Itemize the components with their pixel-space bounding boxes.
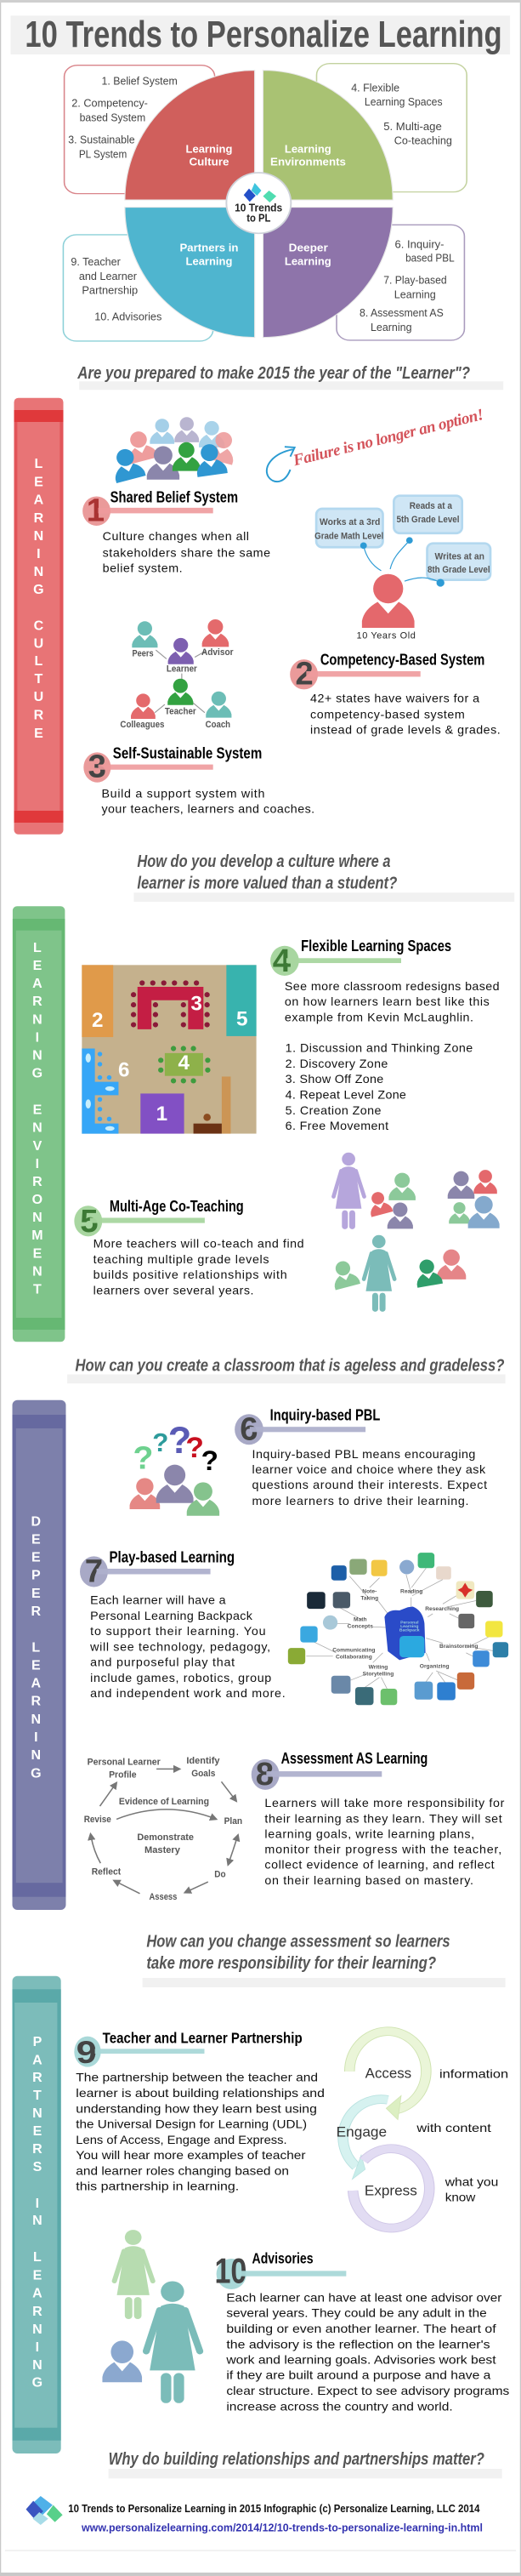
wheel quadrant: partners in learning: Learning — [186, 255, 232, 268]
callout box: deeper learning: 6. Inquiry- — [395, 238, 445, 251]
chart: support network: Peers — [133, 649, 154, 659]
icon: learners with question marks: ? — [168, 1421, 191, 1462]
sidebar: learning culture: I — [37, 547, 41, 561]
sidebar: partners in learning: N — [32, 2322, 42, 2337]
chart: personal learning backpack: Backpack — [399, 1628, 420, 1633]
trend 4: flexible learning spaces: 1. Discussion and Thinking Zone — [286, 1041, 473, 1055]
wheel quadrant: partners in learning: Partners in — [180, 242, 238, 254]
question band — [67, 1375, 506, 1383]
chart: competency levels around learner: Grade Math Level — [314, 531, 383, 541]
trend 7: play-based learning: to support their learning. You — [90, 1624, 266, 1638]
trend 9: teacher and learner partnership: You will hear more examples of teacher — [76, 2150, 306, 2163]
sidebar: deeper learning: I — [34, 1730, 38, 1745]
trend 3: self-sustainable system: 3 — [88, 749, 106, 784]
chart: access, engage, express cycle: Express — [365, 2183, 417, 2198]
trend 8: assessment as learning — [252, 1750, 505, 1887]
trend 10: advisories: Each learner can have at least one advisor over — [226, 2292, 501, 2305]
sidebar: partners in learning: N — [32, 2214, 42, 2228]
sidebar: deeper learning: N — [31, 1713, 41, 1727]
trend 9: teacher and learner partnership: Teacher and Learner Partnership — [103, 2031, 303, 2047]
panel: header and overview wheel — [11, 14, 510, 390]
callout box: deeper learning: based PBL — [405, 253, 455, 265]
sidebar: deeper learning: P — [31, 1569, 41, 1583]
sidebar: deeper learning — [12, 1400, 66, 1910]
sidebar: learning culture: G — [33, 583, 44, 597]
trend 7: play-based learning: and independent work and more. — [90, 1686, 286, 1700]
trend 3: self-sustainable system: Build a support system with — [101, 787, 264, 801]
trend 2: competency-based system: instead of grade levels & grades. — [310, 723, 501, 737]
question band — [143, 1978, 506, 1987]
chart: personal learning backpack: Learning — [400, 1624, 418, 1629]
sidebar: learning environment: V — [33, 1139, 42, 1154]
icon: footer puzzle logo — [26, 2496, 63, 2525]
sidebar: partners in learning: T — [33, 2089, 42, 2103]
trend 10: advisories: 10 — [214, 2251, 246, 2291]
chart: assessment cycle: Profile — [109, 1770, 137, 1780]
wheel quadrant: deeper learning: Learning — [285, 255, 331, 268]
trend 10: advisories: several years. They could be any adult in the — [226, 2308, 487, 2320]
chart: personal learning backpack: Reading — [400, 1588, 422, 1594]
sidebar: learning culture: R — [34, 511, 44, 526]
trend 9: teacher and learner partnership: learner is about building relationships and — [76, 2088, 325, 2100]
callout box: partners in learning: 10. Advisories — [94, 311, 161, 323]
trend 8: assessment as learning: Learners will take more responsibility for — [264, 1796, 505, 1809]
trend 1: shared belief system: belief system. — [103, 561, 183, 574]
chart: classroom floor plan: 2 — [92, 1009, 104, 1032]
chart: access, engage, express cycle: Engage — [337, 2124, 387, 2140]
callout box: partners in learning — [63, 235, 213, 341]
trend 7: play-based learning: 7 — [85, 1554, 103, 1590]
question: culture: How do you develop a culture where a — [137, 852, 390, 871]
sidebar: learning environment — [13, 906, 65, 1342]
chart: personal learning backpack: Communicating — [332, 1647, 375, 1653]
sidebar: learning culture: E — [34, 476, 43, 490]
wheel quadrant: deeper learning — [263, 208, 393, 338]
trend 3: self-sustainable system: your teachers, learners and coaches. — [101, 802, 314, 816]
sidebar: learning environment: N — [32, 1211, 42, 1225]
trend 6: inquiry-based PBL: Inquiry-based PBL means encouraging — [252, 1447, 475, 1461]
chart: competency levels around learner: 10 Years Old — [357, 631, 416, 641]
sidebar: deeper learning: E — [31, 1533, 41, 1547]
sidebar: partners in learning: A — [32, 2287, 42, 2301]
chart: classroom floor plan: 4 — [178, 1051, 190, 1074]
chart: assessment cycle — [84, 1756, 242, 1902]
trend 4: flexible learning spaces: 5. Creation Zone — [286, 1103, 382, 1117]
chart: personal learning backpack: Note- — [362, 1589, 377, 1595]
sidebar: deeper learning: E — [31, 1551, 41, 1565]
sidebar: learning culture: T — [35, 672, 43, 687]
trend 7: play-based learning: Each learner will have a — [90, 1593, 226, 1607]
trend 9: teacher and learner partnership: and learner roles changing based on — [76, 2165, 289, 2178]
trend 2: competency-based system: Competency-Based System — [320, 651, 484, 668]
trend 5: multi-age co-teaching: learners over several years. — [93, 1284, 253, 1297]
callout box: learning environments — [317, 64, 467, 192]
sidebar: learning environment: L — [33, 941, 42, 955]
trend 5: multi-age co-teaching — [74, 1198, 304, 1297]
trend 3: self-sustainable system — [83, 744, 314, 816]
sidebar: learning environment: R — [32, 1175, 42, 1189]
chart: assessment cycle: Identify — [186, 1756, 220, 1766]
question: culture: learner is more valued than a student? — [137, 874, 397, 892]
chart: assessment cycle: Demonstrate — [137, 1832, 194, 1843]
trend 5: multi-age co-teaching: 5 — [80, 1204, 99, 1240]
trend 10: advisories: clear structure. Expect to see advisory programs — [226, 2385, 509, 2398]
chart: classroom floor plan — [82, 965, 257, 1134]
trend 1: shared belief system: Culture changes when all — [103, 529, 249, 543]
chart: personal learning backpack: Researching — [425, 1606, 459, 1612]
sidebar: learning environment: E — [33, 1247, 42, 1261]
sidebar: deeper learning: E — [31, 1659, 41, 1673]
trend 7: play-based learning: Play-based Learning — [109, 1549, 235, 1566]
trend 8: assessment as learning: their learning as they learn. They will set — [264, 1811, 502, 1825]
callout box: deeper learning: 8. Assessment AS — [360, 307, 444, 320]
chart: personal learning backpack: Taking — [360, 1595, 378, 1601]
sidebar: partners in learning: L — [33, 2250, 42, 2265]
callout box: deeper learning: 7. Play-based — [383, 274, 447, 287]
question: assessment — [146, 1931, 450, 1973]
trend 9: teacher and learner partnership: understanding how they learn best using — [76, 2103, 317, 2116]
callout box: learning environments: Learning Spaces — [365, 96, 443, 109]
chart: personal learning backpack: Math — [354, 1617, 367, 1623]
trend 10: advisories: work and learning goals. Advisories work best — [225, 2354, 497, 2367]
trend 4: flexible learning spaces — [270, 938, 500, 1132]
trend 4: flexible learning spaces: example from Kevin McLaughlin. — [285, 1010, 473, 1023]
sidebar: partners in learning: N — [32, 2358, 42, 2373]
callout box: deeper learning: Learning — [371, 322, 412, 334]
sidebar: deeper learning: A — [31, 1677, 42, 1691]
sidebar: learning culture: C — [34, 618, 44, 633]
sidebar: learning culture — [14, 398, 63, 835]
title band — [11, 15, 510, 54]
trend 2: competency-based system — [290, 651, 501, 737]
callout box: learning culture: PL System — [79, 148, 127, 161]
sidebar: partners in learning: E — [33, 2269, 42, 2283]
sidebar: learning culture: A — [34, 493, 44, 508]
trend 5: multi-age co-teaching: builds positive relationships with — [93, 1268, 287, 1281]
chart: personal learning backpack: Brainstorming — [439, 1644, 478, 1650]
icon: group of people — [108, 417, 240, 483]
wheel quadrant: learning culture: Learning — [186, 143, 232, 156]
sidebar: partners in learning: N — [32, 2106, 42, 2121]
trend 5: multi-age co-teaching: More teachers will co-teach and find — [93, 1237, 304, 1251]
trend 9: teacher and learner partnership: Lens of Access, Engage and Express. — [76, 2134, 287, 2147]
chart: access, engage, express cycle: what you — [445, 2176, 498, 2189]
sidebar: deeper learning: E — [31, 1587, 41, 1601]
icon: mixed-age teachers and learners — [329, 1153, 500, 1312]
trend 6: inquiry-based PBL — [235, 1407, 487, 1507]
trend 4: flexible learning spaces: 3. Show Off Zone — [286, 1072, 383, 1086]
chart: support network: Coach — [206, 720, 230, 730]
question band — [79, 381, 503, 390]
sidebar: learning environment: N — [32, 1121, 42, 1136]
trend 2: competency-based system: competency-based system — [310, 708, 465, 721]
sidebar: learning environment: M — [31, 1228, 43, 1243]
trend 7: play-based learning: and purposeful play that — [90, 1656, 235, 1669]
callout box: learning environments: 5. Multi-age — [383, 121, 442, 134]
trend 10: advisories: building or even another learner. The heart of — [226, 2323, 497, 2336]
chart: personal learning backpack: Writing — [369, 1664, 388, 1670]
trend 1: shared belief system: 1 — [87, 493, 105, 528]
trend 3: self-sustainable system: Self-Sustainable System — [113, 744, 262, 761]
chart: assessment cycle: Evidence of Learning — [119, 1797, 209, 1807]
trend 8: assessment as learning: 8 — [256, 1758, 274, 1792]
chart: classroom floor plan: 1 — [156, 1103, 167, 1126]
callout box: deeper learning: Learning — [394, 288, 436, 301]
chart: access, engage, express cycle — [337, 2032, 508, 2228]
sidebar: partners in learning: P — [33, 2035, 42, 2049]
chart: access, engage, express cycle: with content — [416, 2123, 492, 2135]
sidebar: deeper learning: G — [31, 1766, 42, 1781]
trend 4: flexible learning spaces: 4. Repeat Level Zone — [286, 1088, 406, 1102]
trend 6: inquiry-based PBL: more learners to drive their learning. — [252, 1494, 469, 1507]
trend 8: assessment as learning: collect evidence of learning, and reflect — [264, 1858, 495, 1872]
chart: competency levels around learner — [314, 496, 490, 641]
chart: competency levels around learner: Works at a 3rd — [320, 517, 380, 527]
panel: deeper learning — [80, 1407, 508, 1902]
sidebar: learning environment: I — [36, 1030, 39, 1045]
chart: assessment cycle: Personal Learner — [88, 1757, 161, 1767]
icon: learners with question marks: ? — [133, 1440, 153, 1476]
trend 9: teacher and learner partnership: the Universal Design for Learning (UDL) — [76, 2119, 307, 2131]
sidebar: learning culture: N — [34, 565, 43, 579]
panel: partners in learning, lower — [0, 2230, 521, 2576]
sidebar: learning environment: G — [32, 1067, 42, 1081]
sidebar: partners in learning — [12, 1976, 61, 2453]
question band — [109, 2469, 502, 2478]
sidebar: deeper learning: D — [31, 1514, 41, 1529]
trend 8: assessment as learning: learning goals, write learning plans, — [264, 1827, 474, 1841]
sidebar: learning culture: E — [34, 727, 43, 741]
sidebar: learning environment: N — [32, 1012, 42, 1027]
chart: personal learning backpack: Concepts — [348, 1623, 373, 1629]
chart: support network — [120, 619, 234, 730]
sidebar: learning environment: O — [32, 1193, 42, 1207]
chart: assessment cycle: Goals — [191, 1769, 215, 1779]
sidebar: deeper learning: R — [31, 1695, 42, 1709]
trend 6: inquiry-based PBL: Inquiry-based PBL — [270, 1407, 380, 1423]
chart: personal learning backpack: Personal — [400, 1620, 419, 1625]
chart: personal learning backpack: Collaborating — [336, 1654, 372, 1660]
question: culture — [137, 852, 397, 892]
callout box: partners in learning: 9. Teacher — [71, 256, 121, 269]
chart: competency levels around learner: Reads at a — [410, 501, 453, 511]
chart: access, engage, express cycle: know — [445, 2191, 476, 2204]
wheel quadrant: learning culture — [125, 71, 255, 200]
sidebar: partners in learning: R — [32, 2305, 42, 2319]
chart: personal learning backpack — [288, 1553, 508, 1705]
trend 2: competency-based system: 42+ states have waivers for a — [310, 692, 479, 704]
trend 7: play-based learning — [80, 1549, 286, 1700]
trend 5: multi-age co-teaching: teaching multiple grade levels — [93, 1252, 269, 1266]
icon: learners with question marks: ? — [185, 1431, 204, 1464]
chart: classroom floor plan: 5 — [236, 1008, 248, 1030]
chart: access, engage, express cycle: information — [439, 2068, 508, 2081]
chart: access, engage, express cycle: Access — [365, 2066, 411, 2081]
chart: competency levels around learner: 5th Grade Level — [397, 515, 460, 525]
trend 8: assessment as learning: Assessment AS Learning — [281, 1750, 428, 1767]
sidebar: learning culture: L — [35, 457, 43, 471]
sidebar: learning environment: A — [32, 977, 42, 991]
trend 9: teacher and learner partnership: 9 — [76, 2034, 97, 2070]
chart: personal learning backpack: Storytelling — [363, 1671, 394, 1677]
icon: advisor figures — [102, 2230, 200, 2403]
chart: assessment cycle: Do — [214, 1870, 226, 1880]
callout box: learning culture — [65, 66, 215, 194]
sidebar: learning culture: N — [34, 529, 43, 544]
sidebar: partners in learning: G — [32, 2376, 42, 2391]
trend 8: assessment as learning: on their learning based on mastery. — [264, 1873, 473, 1887]
trend 10: advisories: if they are built around a purpose and have a — [226, 2370, 491, 2382]
icon: learners with question marks: ? — [152, 1428, 168, 1457]
arrow: circular arrow — [267, 447, 295, 482]
question band — [133, 892, 514, 902]
chart: assessment cycle: Reflect — [92, 1867, 121, 1878]
panel: learning culture — [82, 417, 514, 902]
trend 10: advisories — [214, 2251, 509, 2414]
sidebar: learning environment: E — [33, 1103, 42, 1118]
trend 4: flexible learning spaces: 6. Free Movement — [286, 1119, 388, 1132]
wheel quadrant: learning environments — [263, 71, 393, 200]
wheel quadrant: partners in learning — [125, 208, 255, 338]
trend 9: teacher and learner partnership — [74, 2031, 325, 2193]
chart: support network: Teacher — [165, 707, 196, 717]
callout box: learning culture: 2. Competency- — [71, 98, 148, 110]
icon: learners with question marks — [130, 1421, 219, 1516]
callout box: learning culture: 1. Belief System — [101, 75, 178, 88]
callout box: deeper learning — [337, 225, 464, 340]
panel: learning environment — [67, 938, 506, 1383]
chart: assessment cycle: Plan — [224, 1816, 242, 1827]
wheel quadrant: learning environments: Learning — [285, 143, 331, 156]
sidebar: learning culture: L — [35, 654, 43, 669]
wheel quadrant: deeper learning: Deeper — [289, 242, 328, 254]
trend 1: shared belief system — [82, 489, 270, 574]
panel: partners in learning, upper — [74, 1931, 508, 2228]
trend 1: shared belief system: Shared Belief System — [110, 489, 238, 505]
chart: assessment cycle: Assess — [149, 1892, 177, 1902]
trend 4: flexible learning spaces: 2. Discovery Zone — [286, 1057, 388, 1070]
trend 6: inquiry-based PBL: 6 — [240, 1412, 258, 1447]
sidebar: learning environment: I — [36, 1157, 39, 1171]
chart: assessment cycle: Mastery — [144, 1845, 181, 1855]
sidebar: deeper learning: R — [31, 1604, 42, 1619]
sidebar: partners in learning: E — [33, 2124, 42, 2139]
sidebar: learning culture: U — [34, 636, 43, 651]
chart: support network: Learner — [167, 664, 197, 675]
callout box: learning culture: based System — [80, 111, 145, 124]
sidebar: partners in learning: R — [32, 2071, 42, 2085]
trend 4: flexible learning spaces: See more classroom redesigns based — [285, 979, 500, 993]
chart: support network: Colleagues — [120, 720, 164, 730]
sidebar: partners in learning: R — [32, 2142, 42, 2157]
icon: learners with question marks: ? — [201, 1445, 218, 1476]
chart: classroom floor plan: 3 — [190, 992, 202, 1015]
sidebar: learning environment: R — [32, 994, 42, 1009]
trend 1: shared belief system: stakeholders share the same — [103, 546, 270, 559]
trend 10: advisories: the advisory is the reflection on the learner's — [226, 2339, 490, 2351]
trend 7: play-based learning: will see technology, pedagogy, — [89, 1640, 270, 1654]
callout box: partners in learning: Partnership — [82, 285, 138, 297]
callout box: learning environments: Co-teaching — [394, 135, 452, 147]
sidebar: learning culture: R — [34, 709, 44, 723]
sidebar: learning environment: N — [32, 1265, 42, 1279]
trend 2: competency-based system: 2 — [295, 657, 314, 692]
trend 4: flexible learning spaces: 4 — [273, 943, 291, 979]
chart: support network: Advisor — [201, 647, 234, 658]
callout box: learning culture: 3. Sustainable — [68, 134, 135, 146]
sidebar: partners in learning: I — [36, 2340, 39, 2355]
wheel centre hub: to PL — [246, 212, 270, 224]
wheel centre hub — [226, 173, 291, 233]
chart: classroom floor plan: 6 — [118, 1059, 129, 1081]
callout: failure is no longer an option: Failure is no longer an option! — [291, 406, 485, 470]
trend 10: advisories: Advisories — [252, 2251, 314, 2267]
sidebar: learning environment: T — [33, 1283, 42, 1297]
trend 10: advisories: increase across the country and world. — [226, 2401, 453, 2414]
sidebar: learning environment: N — [32, 1048, 42, 1063]
trend 7: play-based learning: include games, robotics, group — [90, 1671, 271, 1684]
trend 6: inquiry-based PBL: learner voice and choice where they ask — [252, 1462, 486, 1476]
wheel quadrant: learning environments: Environments — [270, 157, 346, 168]
sidebar: deeper learning: N — [31, 1748, 41, 1763]
trend 9: teacher and learner partnership: this partnership in learning. — [76, 2181, 239, 2193]
trend 4: flexible learning spaces: on how learners learn best like this — [285, 994, 490, 1008]
trend 6: inquiry-based PBL: questions around their interests. Expect — [252, 1478, 487, 1491]
callout box: learning environments: 4. Flexible — [351, 82, 399, 94]
wheel quadrant: learning culture: Culture — [189, 157, 229, 168]
sidebar: learning environment: E — [33, 959, 42, 973]
wheel centre hub: 10 Trends — [235, 201, 282, 214]
trend 9: teacher and learner partnership: The partnership between the teacher and — [76, 2072, 318, 2084]
trend 4: flexible learning spaces: Flexible Learning Spaces — [301, 938, 451, 955]
sidebar: partners in learning: I — [36, 2197, 39, 2211]
trend 7: play-based learning: Personal Learning Backpack — [90, 1609, 253, 1622]
sidebar: partners in learning: S — [33, 2160, 42, 2174]
sidebar: partners in learning: A — [32, 2054, 42, 2068]
trend 5: multi-age co-teaching: Multi-Age Co-Teaching — [110, 1198, 244, 1215]
chart: personal learning backpack: Organizing — [420, 1664, 450, 1670]
chart: competency levels around learner: Writes at an — [435, 552, 484, 561]
trend 8: assessment as learning: monitor their progress with the teacher, — [264, 1843, 501, 1856]
sidebar: deeper learning: L — [31, 1640, 40, 1655]
callout box: partners in learning: and Learner — [79, 271, 137, 283]
chart: competency levels around learner: 8th Grade Level — [428, 565, 490, 575]
sidebar: learning culture: U — [34, 690, 43, 704]
chart: assessment cycle: Revise — [84, 1815, 111, 1825]
